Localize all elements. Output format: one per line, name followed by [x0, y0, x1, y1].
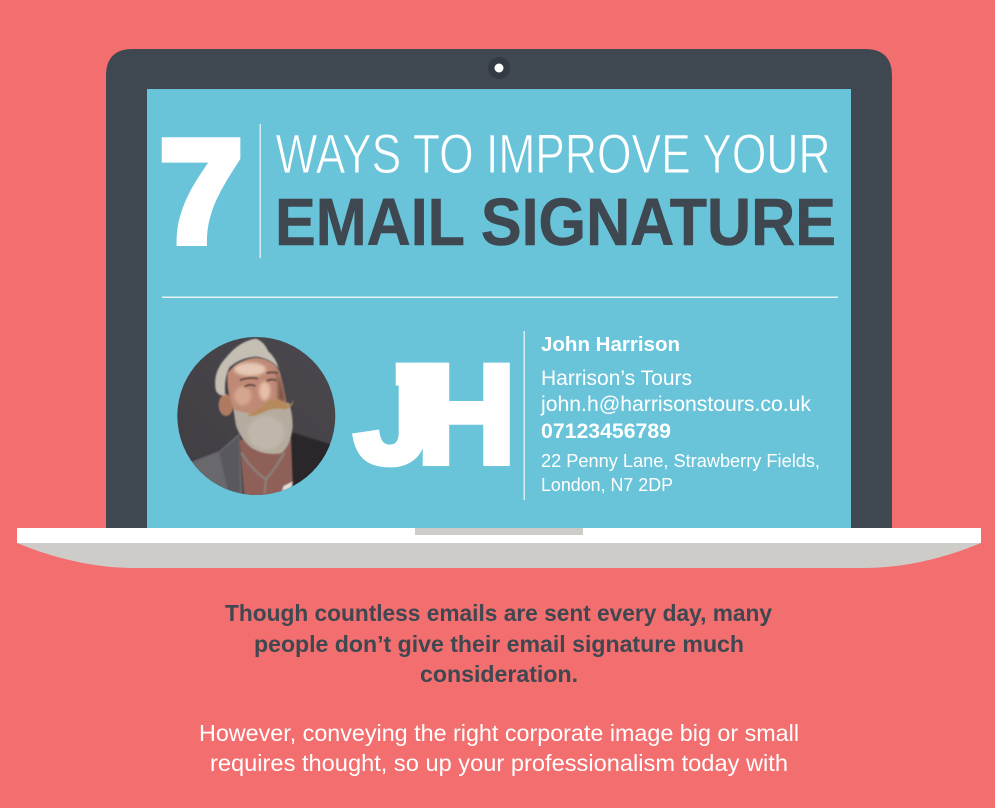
face shadow right	[275, 368, 286, 403]
laptop	[17, 49, 981, 568]
nose highlight	[259, 382, 270, 400]
jacket lapel shadow	[219, 436, 240, 493]
email: john.h@harrisonstours.co.uk	[540, 393, 811, 416]
beard	[233, 403, 293, 454]
intro regular text: However, conveying the right corporate image big or small	[199, 720, 799, 746]
face	[227, 358, 287, 414]
intro bold text: consideration.	[420, 661, 578, 687]
title divider	[260, 124, 261, 258]
laptop base top	[17, 528, 981, 543]
screen	[147, 89, 851, 528]
name: John Harrison	[541, 334, 680, 356]
moustache	[247, 399, 294, 416]
intro bold text	[225, 600, 772, 687]
title block	[160, 111, 836, 273]
J top trim	[372, 356, 396, 386]
phone: 07123456789	[541, 420, 671, 443]
title line two: EMAIL SIGNATURE	[275, 185, 836, 260]
necklace	[241, 453, 284, 493]
cheek highlight	[234, 387, 251, 405]
intro regular text: requires thought, so up your professionalism today with	[210, 750, 788, 776]
ear	[219, 394, 233, 416]
intro bold text: people don’t give their email signature much	[254, 631, 744, 657]
hair	[215, 339, 279, 396]
laptop lid	[106, 49, 892, 528]
horizontal divider	[162, 296, 838, 298]
chest	[239, 439, 293, 496]
JH logo	[354, 336, 516, 493]
title line one: WAYS TO IMPROVE YOUR	[276, 122, 830, 185]
letter H: H	[417, 337, 516, 493]
eyes and brows	[240, 372, 278, 387]
numeral 7: 7	[160, 111, 242, 273]
jacket left	[191, 433, 243, 496]
laptop base underside	[17, 543, 981, 568]
intro regular text	[199, 720, 799, 776]
portrait photo	[177, 337, 336, 495]
webcam	[488, 57, 510, 79]
company: Harrison’s Tours	[541, 367, 692, 390]
contact details	[540, 334, 820, 495]
contact divider	[524, 331, 525, 500]
beard highlight	[248, 417, 284, 448]
address line two: London, N7 2DP	[541, 475, 673, 495]
jacket right	[291, 432, 330, 487]
shirt	[281, 480, 294, 491]
trackpad notch	[415, 528, 583, 535]
forehead highlight	[234, 363, 266, 376]
intro bold text: Though countless emails are sent every day, many	[225, 600, 772, 626]
address line one: 22 Penny Lane, Strawberry Fields,	[541, 451, 820, 471]
letter J: J	[354, 336, 432, 492]
